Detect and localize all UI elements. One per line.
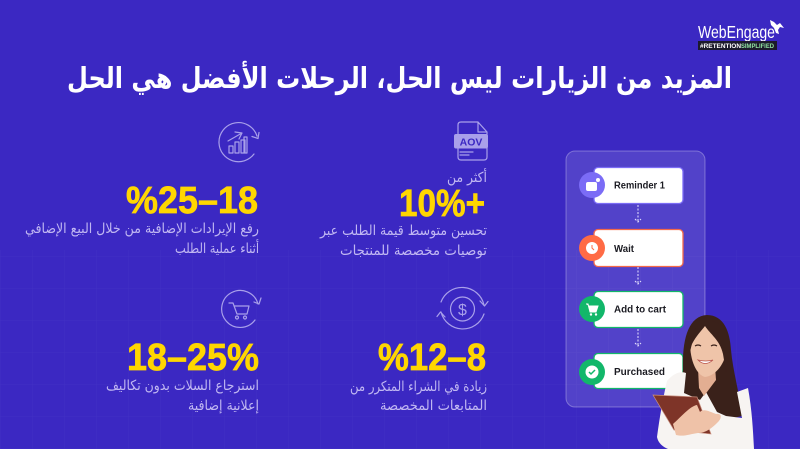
blouse	[657, 372, 754, 449]
description: زيادة في الشراء المتكرر من	[350, 379, 487, 395]
icon: growth chart	[219, 123, 259, 162]
hands	[673, 405, 721, 436]
hair front	[684, 321, 729, 372]
description	[350, 379, 487, 414]
step: Wait	[579, 230, 683, 266]
step: Reminder 1: Reminder 1	[614, 180, 665, 192]
icon: AOV document	[454, 122, 488, 160]
description: توصيات مخصصة للمنتجات	[340, 243, 487, 259]
step: Purchased: Purchased	[614, 366, 665, 378]
icon: cart	[222, 290, 261, 327]
face	[690, 325, 726, 377]
description	[25, 221, 259, 257]
number: %12–8	[378, 337, 486, 379]
logo: WebEngage	[698, 20, 784, 50]
neck	[698, 366, 716, 396]
description: إعلانية إضافية	[188, 398, 259, 414]
description	[106, 378, 259, 414]
icon: AOV document: AOV	[460, 136, 482, 148]
logo: WebEngage: #RETENTION	[700, 43, 742, 50]
stat: cart recovery	[106, 290, 261, 414]
eyes and smile	[695, 345, 717, 346]
arrow	[635, 267, 641, 284]
description: استرجاع السلات بدون تكاليف	[106, 378, 259, 394]
hair back	[680, 315, 742, 420]
arrow	[635, 205, 641, 222]
step: Purchased	[579, 354, 683, 388]
step: Wait: Wait	[614, 243, 634, 255]
description: رفع الإيرادات الإضافية من خلال البيع الإضافي	[25, 221, 259, 237]
woman with tablet	[653, 315, 754, 449]
icon: dollar cycle: $	[458, 302, 467, 319]
panel: customer journey flow	[566, 151, 705, 407]
number: 18–25%	[127, 337, 259, 379]
step: Add to cart: Add to cart	[614, 304, 666, 316]
step: Reminder 1	[579, 168, 683, 204]
label: more than: أكثر من	[447, 168, 487, 186]
logo: WebEngage: SIMPLIFIED	[741, 43, 774, 50]
description	[319, 223, 487, 259]
arrow	[635, 329, 641, 346]
number: 10%+	[399, 183, 485, 225]
stat: upsell revenue	[25, 123, 259, 257]
number: %25–18	[126, 180, 258, 222]
step: Add to cart	[579, 292, 683, 328]
description: تحسين متوسط قيمة الطلب عبر	[319, 223, 487, 239]
stat: repeat purchase	[350, 287, 488, 414]
description: أثناء عملية الطلب	[175, 239, 259, 257]
logo: WebEngage: WebEngage	[698, 22, 775, 42]
description: المتابعات المخصصة	[380, 398, 487, 414]
stat: AOV	[319, 122, 488, 259]
tablet	[653, 395, 711, 434]
